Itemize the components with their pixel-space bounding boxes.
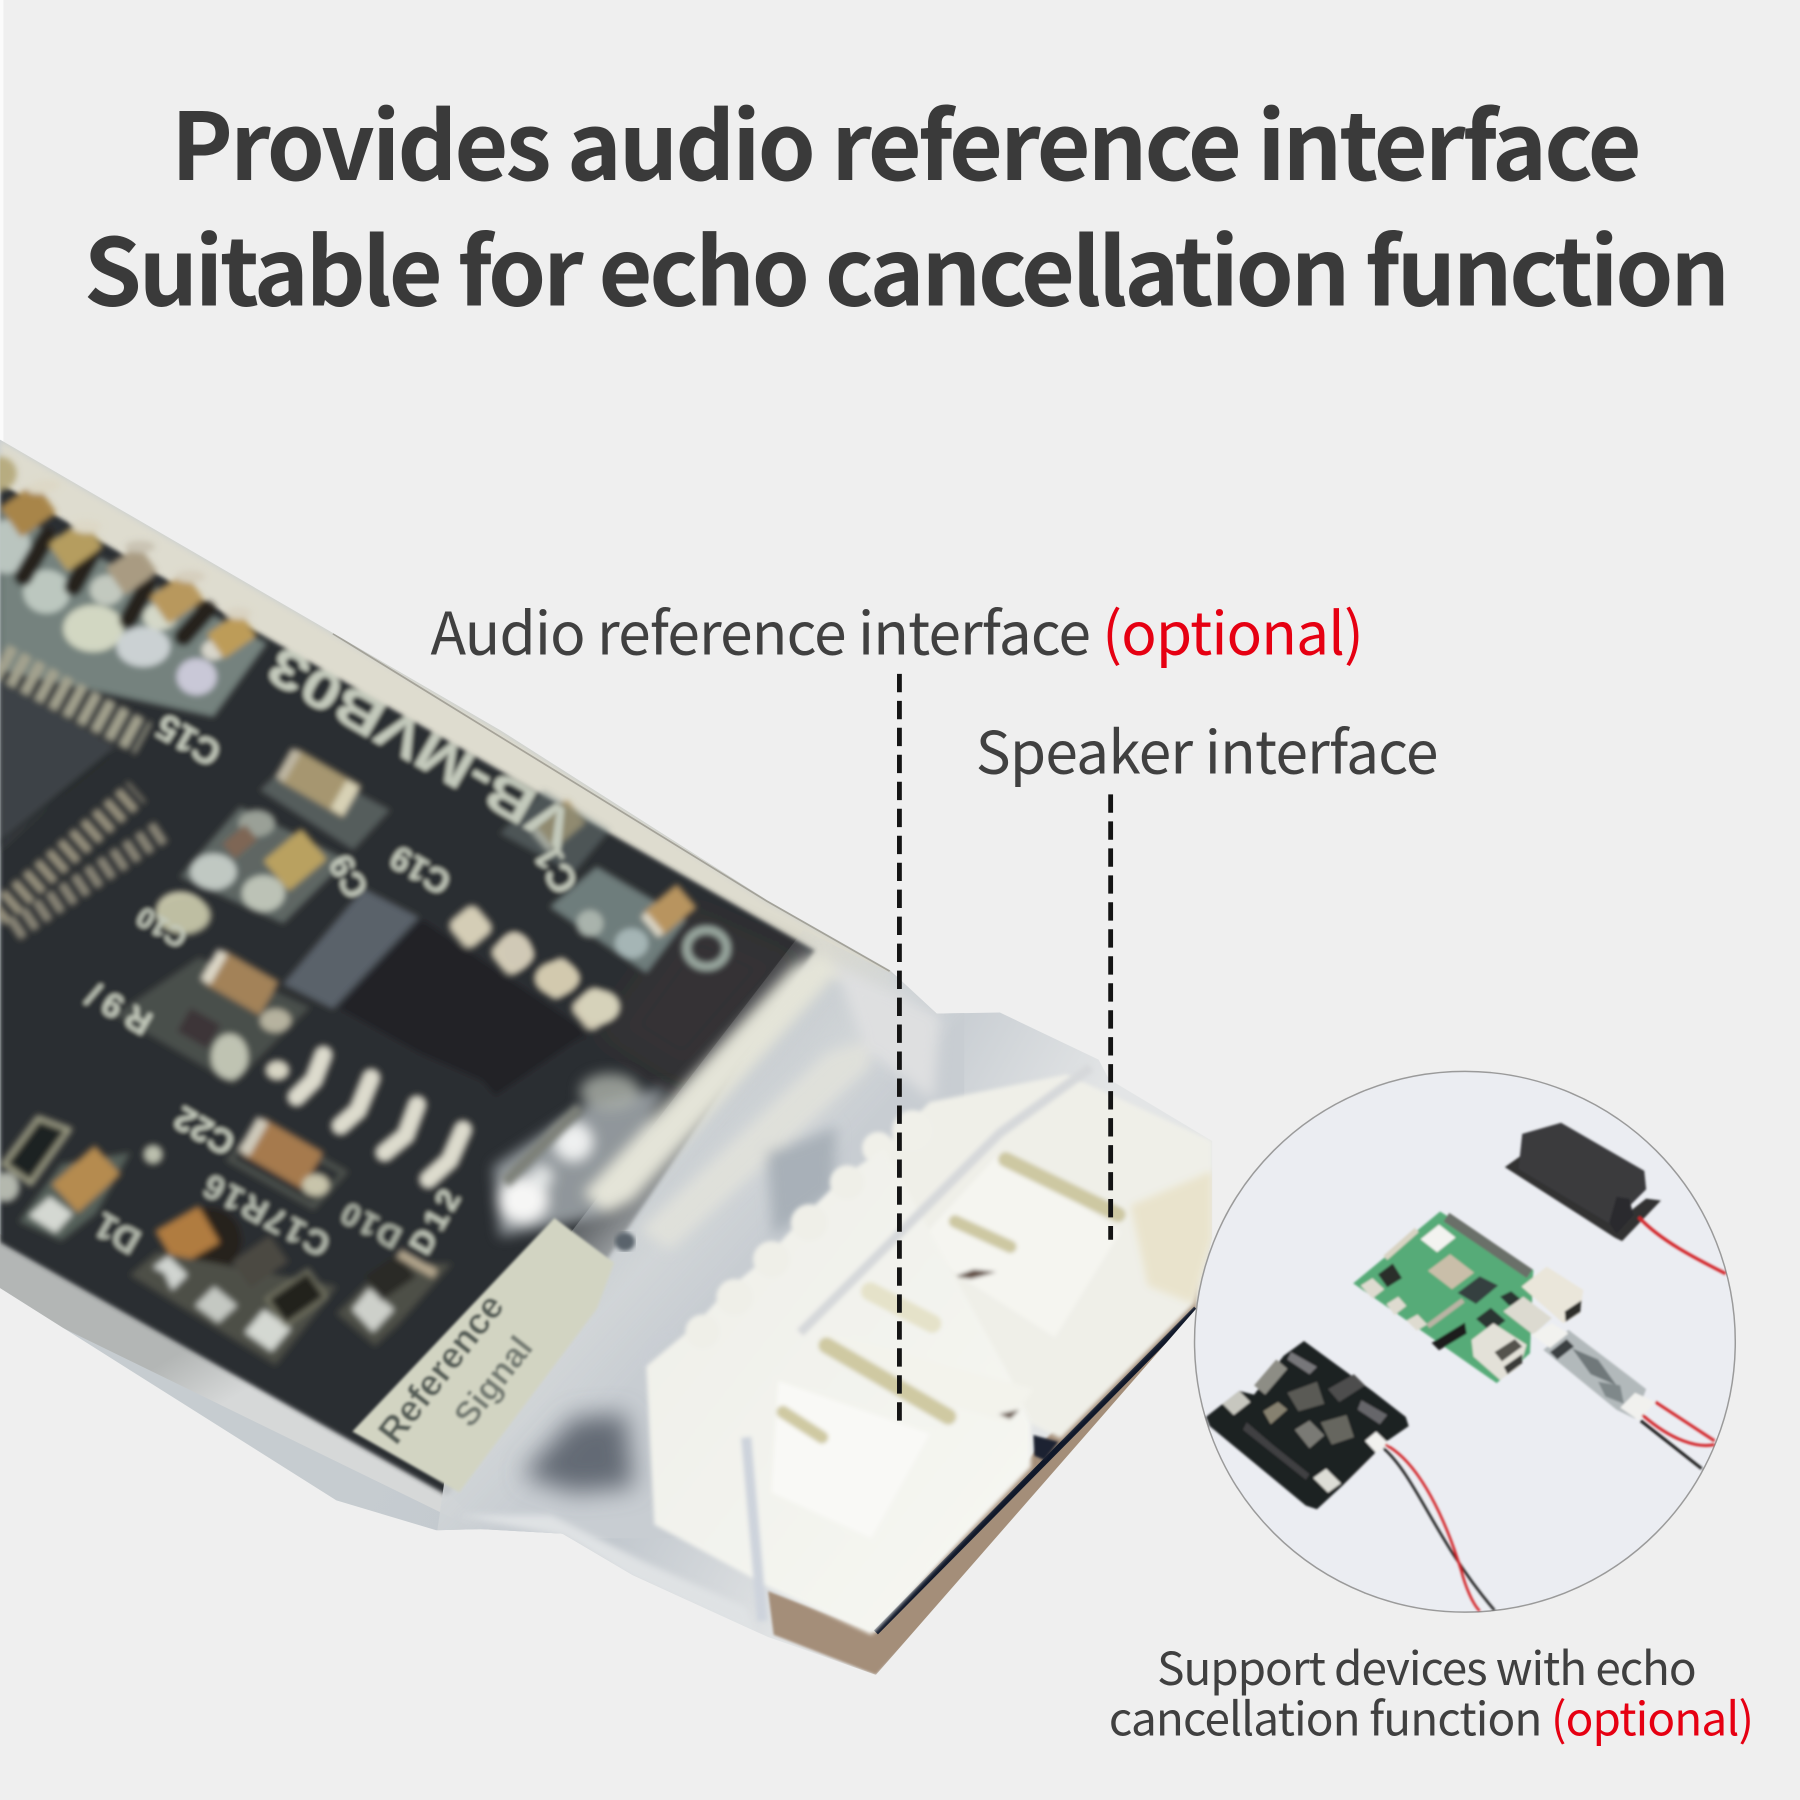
C22 capacitor [226,1115,348,1210]
wifi shield [1421,1225,1456,1252]
SOIC chip [339,919,587,1095]
tube highlights [493,953,940,1251]
dark voice module board [1206,1341,1409,1509]
title: Provides audio reference interface [171,72,1642,207]
tube lower rim [0,1234,442,1512]
top row capacitors [0,457,257,659]
cream streak two [640,1040,870,1250]
black seam along PCB [876,1309,1196,1632]
reference signal label: Reference [370,1286,512,1451]
title [84,72,1730,332]
speaker wire [1639,1217,1726,1274]
silkscreen text [80,635,588,1264]
photo: circuit board module [0,436,1217,1676]
tube lower highlight [459,1515,758,1636]
silkscreen text: C15 [149,706,228,775]
dark spot in tube [615,1232,635,1251]
silkscreen text: D12 [402,1183,468,1261]
components cluster [1378,1263,1402,1287]
dashed leader: audio reference [897,674,902,1421]
reference signal label: Signal [447,1329,541,1434]
SoC [1428,1254,1474,1289]
plum tint near PCB corner [630,940,766,1060]
thin dark outline on the tube edge [333,634,890,971]
caption: supported devices: cancellation function (optional) [1109,1684,1754,1750]
brown diode [155,1206,241,1273]
D1 LED parts [0,1118,162,1241]
label: audio reference interface: Audio reference interface (optional) [430,586,1364,671]
dark PCB [0,457,815,1496]
dark gap under rear connector [1033,1435,1058,1460]
caption: supported devices: Support devices with echo [1157,1633,1697,1699]
rear connector ridge [862,1110,933,1164]
reference signal label [352,1218,614,1492]
front connector ridge [685,1165,864,1349]
dark cap shadows [23,537,207,637]
C19 capacitor [275,747,361,818]
mottled pad box [550,867,687,973]
grey halo around SOIC chip [283,889,419,1009]
clear wrap fade over PCB [436,930,964,1538]
front connector: audio reference interface [645,1068,1091,1635]
pale pads [0,520,225,695]
clear bands over connectors [746,1437,762,1621]
silkscreen text: C1 [525,836,588,901]
C10 capacitor [115,948,310,1084]
RAM chip [1458,1276,1498,1304]
white blobs [498,1177,548,1223]
dark slate shadow under tube [522,1414,634,1492]
camera connector [1385,1230,1417,1258]
cream streak one [583,953,840,1213]
silkscreen text: C10 [131,900,193,954]
USB stick wires [1641,1402,1715,1469]
silkscreen text: D10 [335,1195,407,1256]
upper tube wash [833,963,940,1100]
silkscreen text: R9/ [80,974,159,1042]
fog near D12 [493,1087,667,1237]
rear connector contacts [955,1159,1118,1247]
C19 outline [260,758,390,850]
title: Suitable for echo cancellation function [84,197,1730,332]
silkscreen text: VB-MVB03 [257,635,586,859]
QFP upper pins [0,660,143,738]
upper-left component cluster [0,457,390,930]
front connector recess [771,1381,930,1538]
silkscreen text: C19 [384,837,457,902]
tiny chip pads on corner [498,933,532,970]
audio jack [1432,1323,1467,1350]
caption: supported devices [1109,1633,1754,1750]
chip leads [297,1055,463,1179]
label: speaker interface: Speaker interface [976,706,1438,791]
QFP lower pins [0,792,163,930]
diagonal trace on PCB [505,1108,580,1182]
upper-right parts near PCB corner [498,790,727,1023]
clear heat-shrink tube [0,436,1217,1676]
Raspberry Pi board [1353,1212,1583,1383]
silkscreen text: C22 [168,1098,242,1162]
USB sound card stick [1531,1323,1655,1421]
voice module wires [1384,1445,1494,1611]
dashed leader: speaker [1109,794,1113,1240]
GPIO header [1446,1217,1530,1274]
front connector contacts [783,1291,948,1437]
white edge strip [0,0,3,442]
lower chips and silver pads [130,1235,451,1365]
C5 ring [687,930,727,967]
chip pads [157,896,617,1033]
rear connector recess [914,1151,1120,1337]
cream top edge of the board [0,440,907,1010]
micro HDMI and power ports [1361,1278,1384,1298]
silkscreen text: C9 [322,848,377,905]
lower cap and pads [157,807,347,928]
blue-grey patch [767,1127,837,1237]
rear connector shade [1131,1171,1212,1304]
ethernet port [1521,1267,1583,1323]
debris mark [955,1270,996,1279]
mottled pad region [0,507,267,717]
silkscreen text: C17R16 [197,1166,337,1264]
USB ports [1503,1297,1552,1335]
PCB side edge [768,1268,1196,1675]
pale pads [577,910,603,937]
QFP chip body [0,678,115,850]
rear connector: speaker interface [862,1074,1212,1438]
silkscreen text: D1 [87,1204,147,1263]
lower-left component cluster [0,889,617,1365]
debris mark [999,1410,1019,1419]
speaker box [1505,1123,1661,1241]
tan capacitors [640,885,696,939]
circle inset: compatible devices [1195,1071,1735,1612]
